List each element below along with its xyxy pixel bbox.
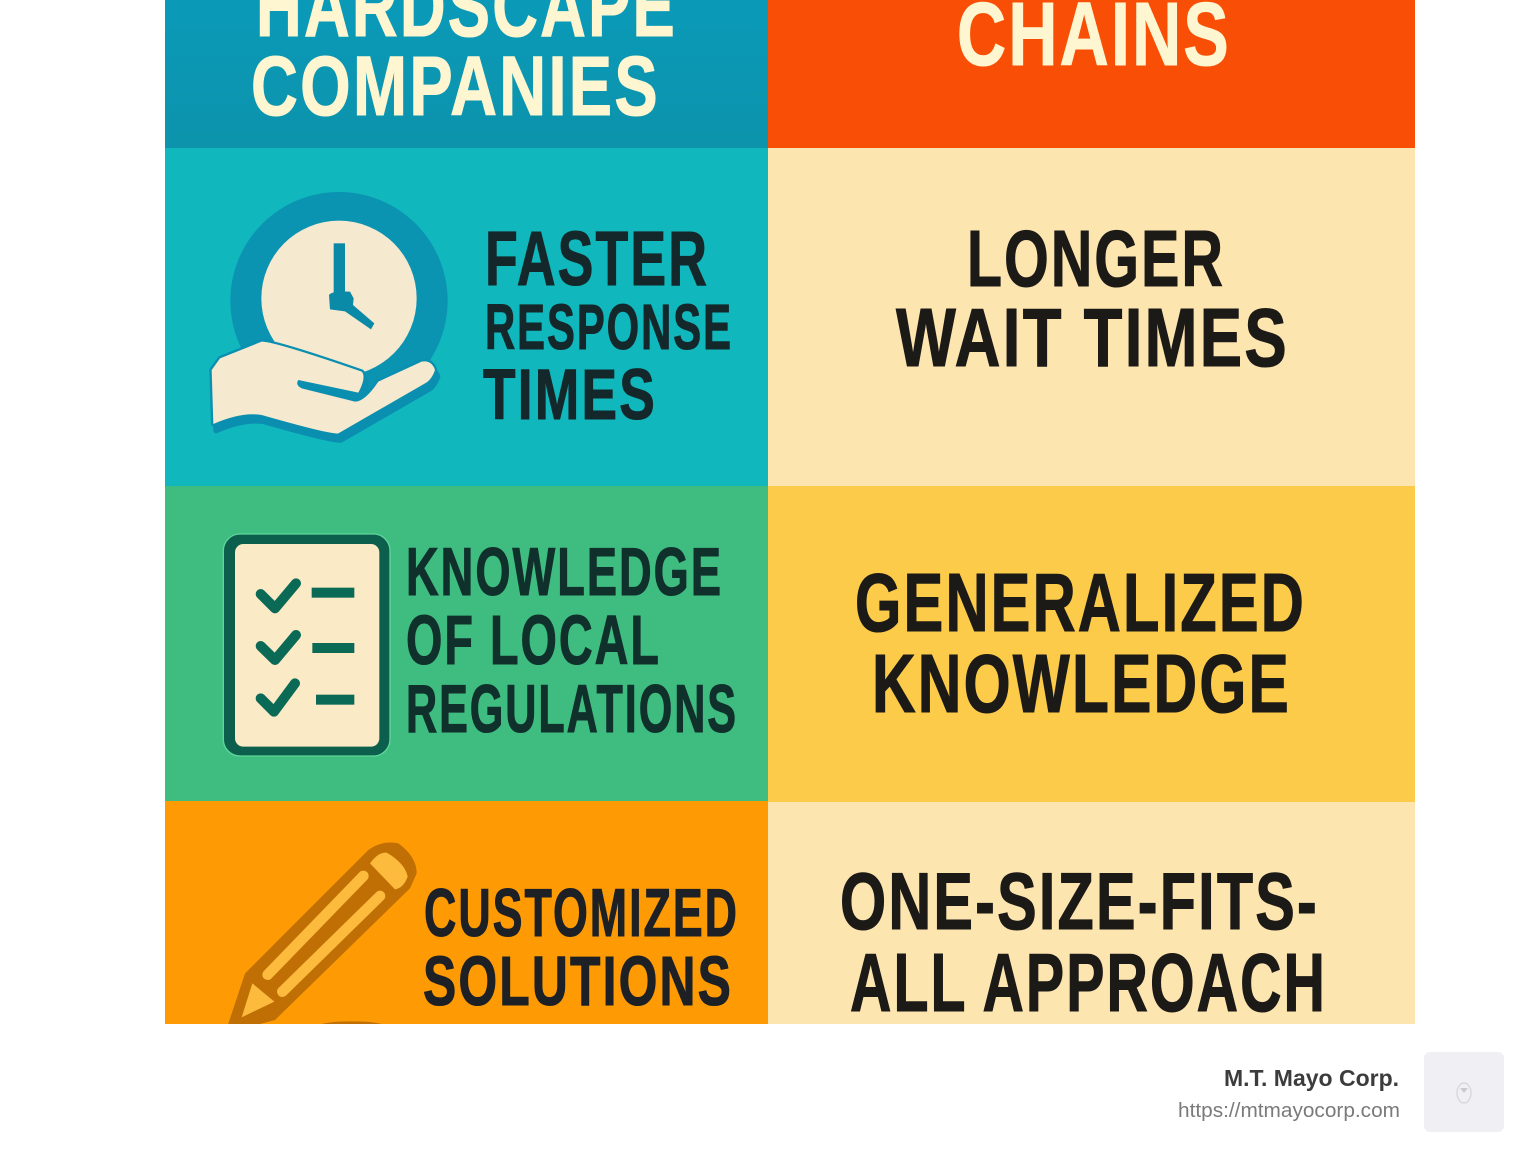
footer url: https://mtmayocorp.com <box>1178 1100 1400 1122</box>
icon: checklist <box>223 534 390 756</box>
row 3 left: customized solutions <box>165 801 768 1031</box>
row 2 right: generalized knowledge <box>768 486 1415 802</box>
row 1 left: faster response times: FASTER <box>485 216 709 302</box>
row 3 right: one-size-fits-all approach: ONE-SIZE-FITS- <box>840 857 1319 947</box>
row 1 right: longer wait times: LONGER <box>967 214 1225 303</box>
row 1 left: faster response times <box>165 148 768 486</box>
row 2 right: generalized knowledge: KNOWLEDGE <box>872 637 1291 730</box>
footer company name: M.T. Mayo Corp. <box>1224 1065 1399 1091</box>
header: hardscape companies: COMPANIES <box>251 39 660 133</box>
icon: pencil <box>227 842 417 1031</box>
row 3 left: customized solutions: CUSTOMIZED <box>424 875 739 951</box>
row 3 right: one-size-fits-all approach <box>768 802 1415 1029</box>
header: hardscape companies <box>165 0 768 148</box>
row 1 left: faster response times: RESPONSE <box>485 291 733 363</box>
row 2 left: knowledge of local regulations: OF LOCAL <box>406 601 661 679</box>
row 2 right: generalized knowledge: GENERALIZED <box>855 556 1306 649</box>
icon: clock in hand <box>212 192 448 440</box>
row 1 right: longer wait times <box>768 148 1415 486</box>
row 3 right: one-size-fits-all approach: ALL APPROACH <box>850 936 1327 1029</box>
comparison chart <box>165 0 1415 1031</box>
row 2 left: knowledge of local regulations: REGULATIONS <box>406 671 738 747</box>
header: chains <box>768 0 1415 148</box>
row 1 left: faster response times: TIMES <box>483 356 657 435</box>
row 2 left: knowledge of local regulations <box>165 486 768 801</box>
row 1 right: longer wait times: WAIT TIMES <box>896 291 1289 384</box>
row 2 left: knowledge of local regulations: KNOWLEDGE <box>406 534 723 610</box>
footer logo placeholder <box>1424 1052 1504 1132</box>
row 3 left: customized solutions: SOLUTIONS <box>423 942 733 1020</box>
